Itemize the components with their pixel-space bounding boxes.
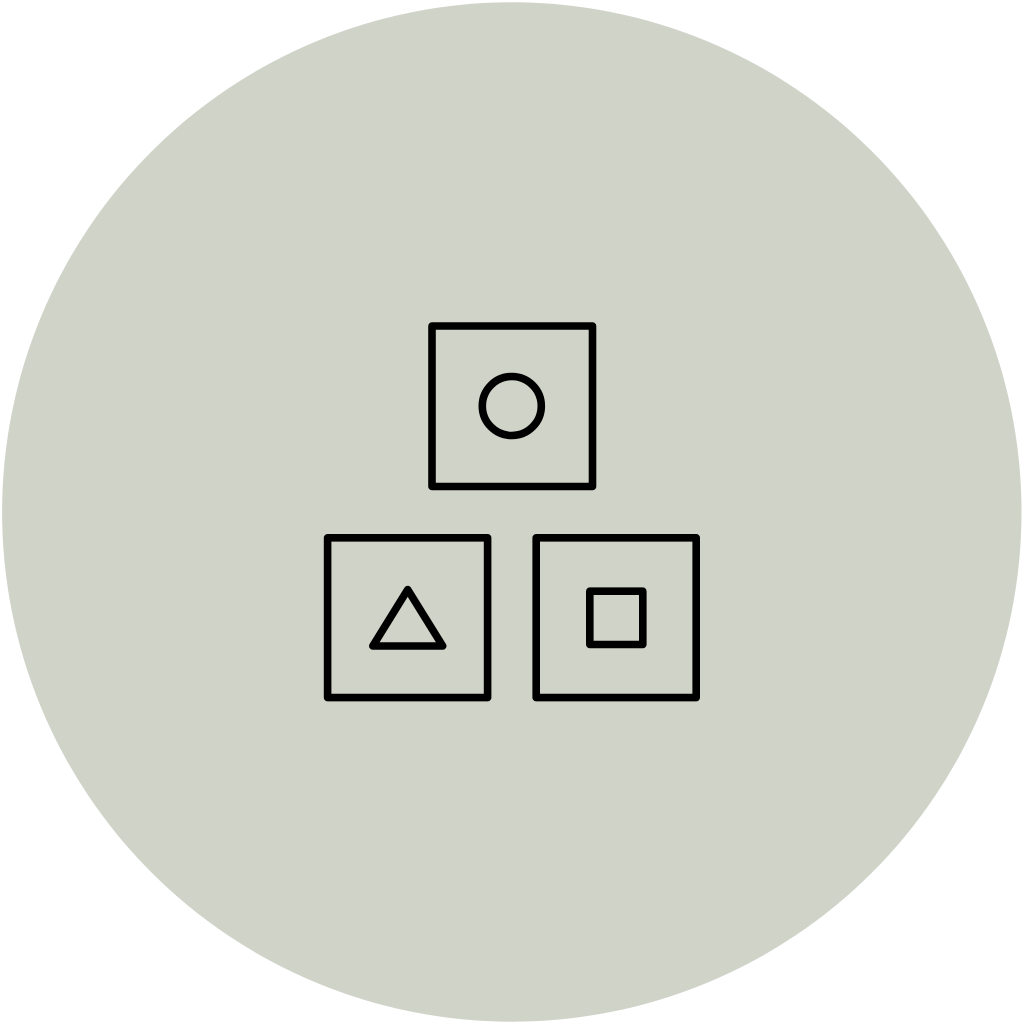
icon: three blocks xyxy=(328,326,696,698)
bottom-right block with square xyxy=(536,538,696,698)
top block with circle xyxy=(432,326,592,486)
bottom-left block with triangle xyxy=(328,538,488,698)
